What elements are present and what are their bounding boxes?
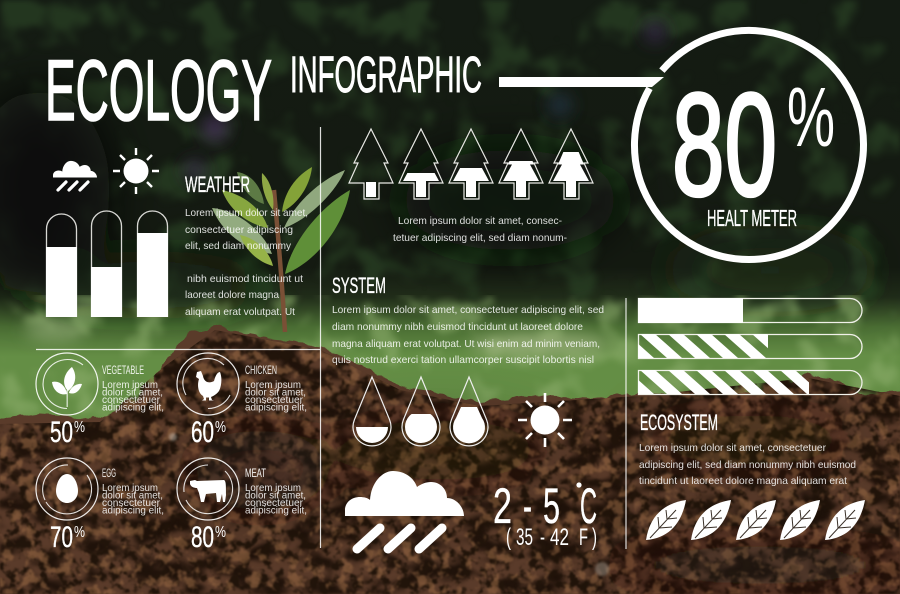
chicken item: dolor sit amet,: [245, 388, 306, 398]
chicken item: consectetuer: [245, 395, 304, 406]
egg item: dolor sit amet,: [102, 490, 163, 502]
weather heading and text: elit, sed diam nonummy: [185, 241, 292, 252]
meat item: 80: [191, 521, 214, 554]
drop 3: [450, 377, 488, 446]
chicken item: CHICKEN: [245, 363, 277, 377]
egg item: 70: [50, 521, 73, 554]
meat item: dolor sit amet,: [245, 490, 306, 502]
tree caption: tetuer adipiscing elit, sed diam nonum-: [393, 233, 567, 244]
temperature readout: ): [592, 524, 597, 551]
temperature readout: F: [579, 524, 588, 551]
weather heading and text: nibh euismod tincidunt ut: [187, 274, 303, 285]
temperature readout: 42: [550, 524, 569, 551]
system heading and text: [332, 273, 604, 366]
ecosystem heading and text: Lorem ipsum dolor sit amet, consectetuer: [639, 443, 827, 454]
weather heading and text: laoreet dolore magna: [185, 290, 279, 301]
egg item: adipiscing elit,: [102, 506, 164, 516]
temperature readout: [493, 478, 597, 551]
tree 4: [499, 129, 543, 199]
icon row: water drops: [353, 377, 488, 446]
chicken item: 60: [191, 416, 214, 449]
system heading and text: diam nonummy nibh euismod tincidunt ut laoreet dolore: [332, 322, 583, 333]
egg item: [36, 458, 164, 554]
weather heading and text: aliquam erat volutpat. Ut: [185, 307, 295, 318]
title: ECOLOGY: [45, 43, 272, 139]
drop 1: [353, 377, 391, 446]
meat item: consectetuer: [245, 498, 304, 509]
bar 2 striped: [638, 334, 862, 358]
egg item: Lorem ipsum: [102, 483, 158, 494]
soil mound: [0, 326, 900, 594]
ecosystem heading and text: tincidunt ut laoreet dolore magna aliquam erat: [639, 476, 847, 487]
chicken item: adipiscing elit,: [245, 402, 307, 414]
system heading and text: Lorem ipsum dolor sit amet, consectetuer adipiscing elit, sed: [332, 305, 604, 316]
vegetable item: Lorem ipsum: [102, 380, 158, 391]
text: C: [580, 478, 597, 534]
temperature readout: -: [523, 478, 532, 534]
meat item: [177, 458, 307, 554]
health meter callout: %: [787, 70, 835, 164]
temperature readout: 35: [516, 524, 533, 551]
icon: egg: [56, 474, 78, 503]
bar chart: weather levels: [46, 211, 168, 317]
health meter callout: [499, 30, 864, 259]
drop 2: [402, 377, 440, 446]
ecosystem heading and text: [639, 410, 856, 487]
icon row: leaves: [646, 500, 865, 540]
system heading and text: quis nostrud exerci tation ullamcorper suscipit lobortis nisl: [332, 355, 594, 366]
chicken item: Lorem ipsum: [245, 380, 301, 391]
meat item: Lorem ipsum: [245, 483, 301, 494]
temperature readout: (: [506, 524, 511, 551]
weather heading and text: WEATHER: [185, 172, 250, 197]
chicken item: [177, 353, 307, 449]
meat item: adipiscing elit,: [245, 506, 307, 516]
system heading and text: magna aliquam erat volutpat. Ut wisi enim ad minim veniam,: [332, 339, 600, 350]
tree caption: Lorem ipsum dolor sit amet, consec-: [398, 216, 562, 227]
vegetable item: adipiscing elit,: [102, 402, 164, 414]
icon: cow: [190, 480, 226, 502]
tree 5: [549, 129, 593, 199]
icon: small rain cloud: [53, 161, 97, 190]
system heading and text: SYSTEM: [332, 273, 386, 298]
bar 3 striped: [638, 370, 862, 394]
vegetable item: [36, 353, 164, 449]
ecosystem heading and text: adipiscing elit, sed diam nonummy nibh euismod: [639, 460, 856, 471]
leaf 1: [646, 500, 686, 540]
egg item: %: [74, 524, 85, 541]
leaf 3: [736, 500, 776, 540]
temperature readout: 2: [493, 478, 512, 534]
vegetable item: consectetuer: [102, 395, 161, 406]
leaf 4: [780, 500, 820, 540]
icon: sprout: [52, 367, 82, 407]
meat item: MEAT: [245, 466, 266, 480]
egg item: EGG: [102, 466, 116, 480]
egg item: consectetuer: [102, 498, 161, 509]
dividers: [36, 127, 626, 549]
ecosystem heading and text: ECOSYSTEM: [640, 410, 718, 435]
vegetable item: VEGETABLE: [102, 363, 144, 377]
tree 2: [399, 129, 443, 199]
leaf 2: [691, 500, 731, 540]
weather heading and text: consectetuer adipiscing: [185, 225, 293, 236]
meat item: %: [215, 524, 226, 541]
progress bars: [638, 298, 862, 394]
panel: food items: [36, 353, 307, 554]
health meter callout: 80: [672, 63, 777, 226]
vegetable item: %: [74, 419, 85, 436]
icon: large rain cloud: [345, 471, 464, 549]
weather heading and text: Lorem ipsum dolor sit amet,: [185, 208, 308, 219]
health meter callout: HEALT METER: [707, 205, 797, 231]
leaf 5: [825, 500, 865, 540]
plant seedling: [212, 167, 350, 332]
vegetable item: 50: [50, 416, 73, 449]
vegetable item: dolor sit amet,: [102, 388, 163, 398]
temperature readout: 5: [543, 478, 560, 534]
icon: small sun: [113, 148, 159, 194]
weather heading and text: [185, 172, 308, 318]
chicken item: %: [215, 419, 226, 436]
temperature readout: -: [540, 524, 545, 551]
tree caption: [393, 216, 567, 244]
tree 3: [449, 129, 493, 199]
icon: large sun: [518, 393, 572, 447]
icon: chicken: [196, 371, 221, 400]
icon row: tree progress: [349, 129, 593, 199]
title: INFOGRAPHIC: [290, 46, 482, 103]
tree 1: [349, 129, 393, 199]
bar 1: [638, 298, 862, 323]
